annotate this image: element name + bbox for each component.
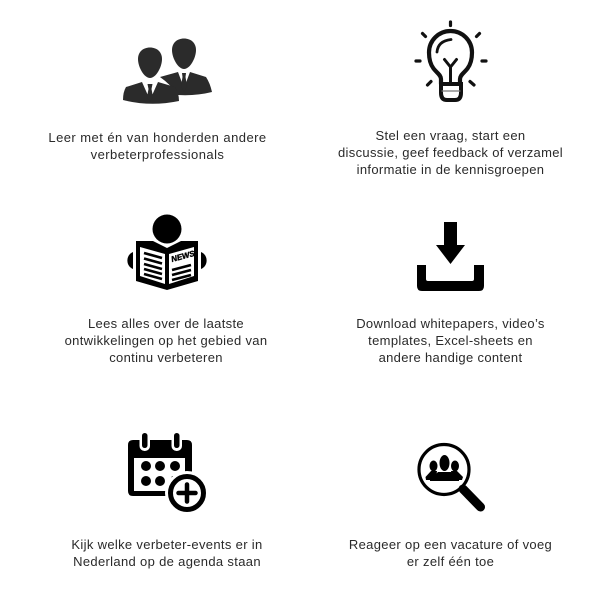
icon: two business people (123, 38, 212, 104)
icon: calendar with plus (128, 433, 209, 515)
text: read the latest (65, 316, 267, 365)
text: ask a question: discussie, geef feedback of verzamel (338, 145, 563, 160)
text: events agenda: Nederland op de agenda staan (73, 554, 261, 569)
text: events agenda: Kijk welke verbeter-events er in (71, 537, 263, 552)
text: events agenda (71, 537, 263, 569)
text: download content (356, 316, 545, 365)
text: learn with professionals: verbeterprofessionals (91, 147, 224, 162)
text: download content: templates, Excel-sheets en (368, 333, 533, 348)
text: ask a question: Stel een vraag, start een (376, 128, 525, 143)
icon: person reading newspaper (127, 214, 207, 290)
text: learn with professionals (48, 130, 267, 162)
text: vacancies: Reageer op een vacature of voeg (349, 537, 552, 552)
text: ask a question (338, 128, 563, 177)
text: ask a question: informatie in de kennisgroepen (357, 162, 544, 177)
text: vacancies (349, 537, 552, 569)
icon: magnifying glass with people (419, 444, 480, 507)
text: vacancies: er zelf één toe (407, 554, 494, 569)
text: read the latest: Lees alles over de laatste (88, 316, 244, 331)
text: read the latest: ontwikkelingen op het gebied van (65, 333, 267, 348)
text: download content: Download whitepapers, video’s (356, 316, 545, 331)
icon: download arrow into tray (417, 222, 484, 291)
text: read the latest: continu verbeteren (109, 350, 223, 365)
icon: light bulb (416, 22, 486, 100)
icon: person reading newspaper: NEWS (170, 249, 196, 264)
text: learn with professionals: Leer met én van honderden andere (48, 130, 267, 145)
text: download content: andere handige content (379, 350, 522, 365)
